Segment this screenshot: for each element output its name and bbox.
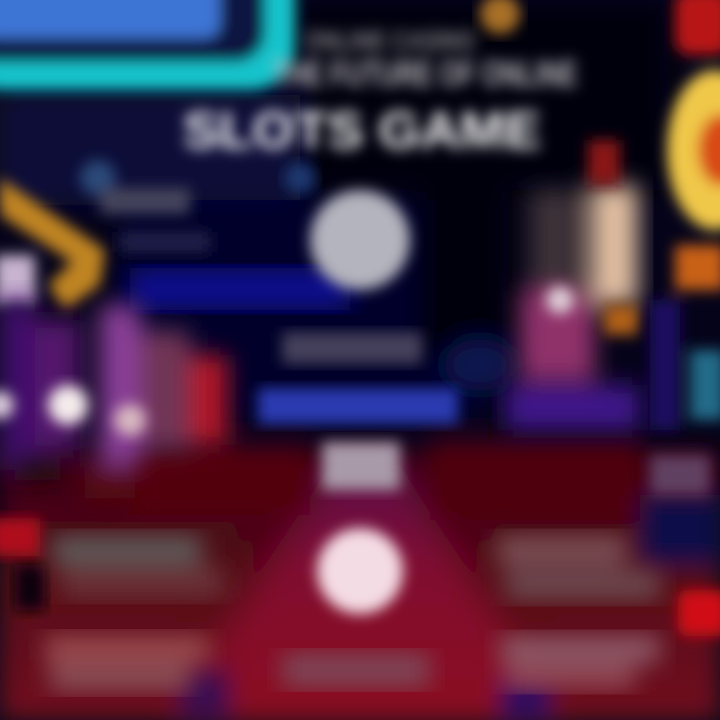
panel: left slot machines: [0, 300, 228, 498]
slot machine lights: [0, 385, 146, 436]
text block: bottom right: [500, 635, 660, 689]
top dark band: [300, 0, 670, 190]
icon: small top circle: [284, 162, 316, 194]
right red panel: [430, 440, 640, 520]
left red accent: [0, 518, 40, 556]
title: SLOTS GAME: [183, 102, 541, 160]
night sky glow: [0, 95, 300, 205]
text block: middle left: [52, 535, 225, 598]
sky lower: [120, 200, 480, 420]
icon: upper circle: [310, 190, 410, 290]
right side blue band: [640, 495, 720, 565]
text block: bottom left: [45, 635, 210, 691]
icon: top coin: [480, 0, 520, 34]
icon: dark corner: [15, 565, 45, 610]
title: [183, 25, 578, 160]
text block: center small: [322, 442, 400, 490]
text block: center heading: [282, 332, 422, 364]
text block: left intro: [80, 160, 210, 252]
text block: bottom center: [282, 652, 430, 688]
panel: right slot machines: [505, 185, 640, 430]
bottom left blue shade: [180, 670, 230, 720]
blue band: [130, 268, 350, 310]
bottom right blue shade: [500, 680, 550, 720]
panel: far right sign: [650, 0, 720, 636]
right slot details: [546, 140, 638, 335]
red carpet floor: [0, 450, 720, 720]
icon: left sign arrow: [0, 178, 105, 310]
left red panel: [130, 445, 310, 515]
title: ONLINE CASINO: [305, 25, 475, 56]
blue glow: [444, 339, 516, 391]
center carpet: [170, 465, 560, 720]
icon: lower circle: [317, 528, 403, 614]
panel: top left banner: [0, 0, 295, 90]
text block: middle right: [497, 535, 660, 600]
text block: blue heading: [258, 388, 458, 424]
dark column: [420, 190, 510, 360]
title: THE FUTURE OF ONLINE: [272, 53, 578, 94]
